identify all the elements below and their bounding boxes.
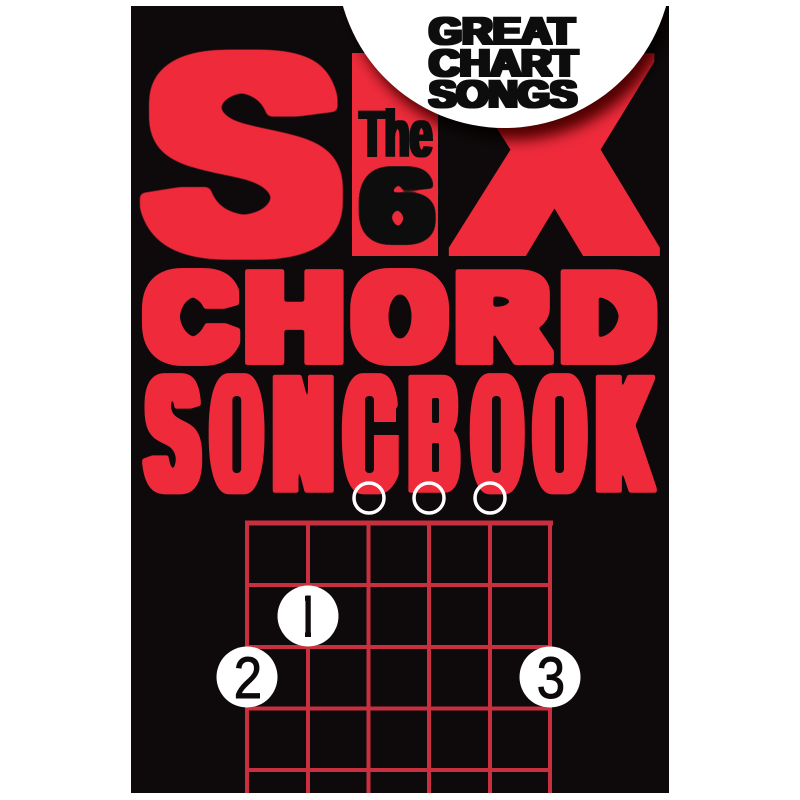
heading: CHORD: O [356, 251, 444, 384]
heading: CHORD: D [562, 250, 653, 383]
title word: S: S [146, 0, 339, 309]
open string markers [354, 483, 505, 513]
heading: CHORD: H [246, 250, 343, 383]
heading: SONGBOOK [148, 341, 650, 527]
badge: white circle with Great Chart Songs: GREAT [429, 10, 575, 52]
circle drop shadow [344, 0, 680, 140]
heading: SONGBOOK: G [347, 342, 395, 527]
heading: CHORD: C [147, 251, 234, 384]
numeral: 6: 6 [361, 148, 433, 263]
chord grid [245, 521, 553, 793]
heading: CHORD [147, 250, 653, 384]
letter counters [225, 278, 571, 478]
heading: SONGBOOK: B [412, 342, 455, 527]
text: The: The [360, 96, 432, 171]
heading: SONGBOOK: K [599, 341, 650, 526]
heading: SONGBOOK: N [276, 342, 331, 527]
book cover background [131, 6, 669, 793]
finger marker 1: 1 [290, 583, 324, 650]
finger marker 2 [216, 646, 278, 711]
finger marker 3 [520, 646, 580, 711]
finger marker 3: 3 [537, 646, 565, 711]
heading: SONGBOOK: O [537, 342, 582, 527]
heading: CHORD: R [457, 250, 547, 383]
heading: SONGBOOK: O [475, 342, 519, 527]
finger marker 1 [278, 583, 338, 650]
badge: white circle with Great Chart Songs: SONGS [429, 73, 577, 116]
heading: SONGBOOK: S [148, 342, 197, 527]
title letter X: X [464, 0, 646, 312]
badge: white circle with Great Chart Songs: CHART [429, 42, 578, 84]
heading: SONGBOOK: O [214, 342, 259, 527]
finger marker 2: 2 [234, 646, 262, 711]
title letter I block [352, 53, 438, 256]
badge: white circle with Great Chart Songs [336, 0, 672, 128]
